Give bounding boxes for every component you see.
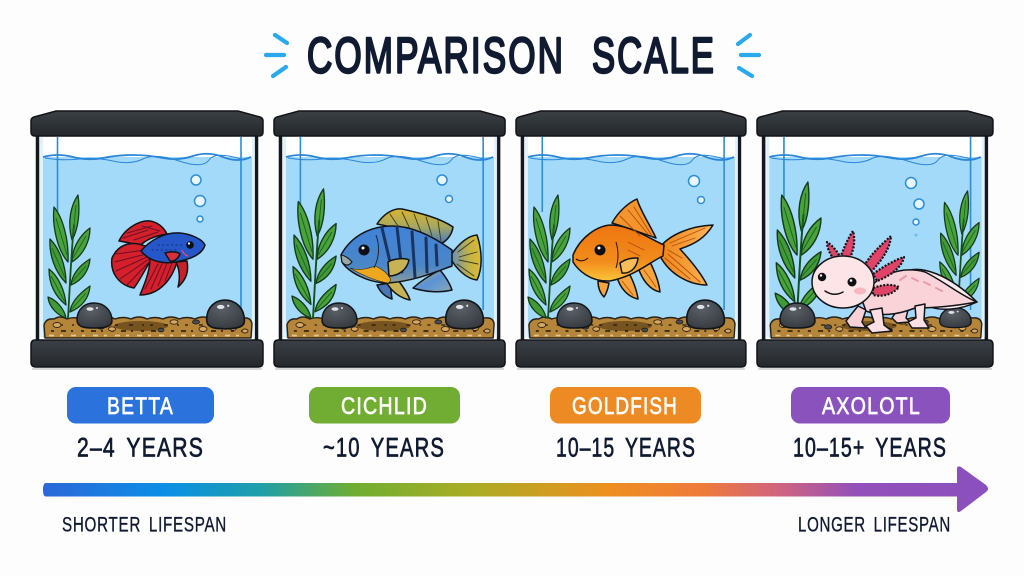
label: cichlid (309, 387, 460, 424)
bubbles (191, 175, 206, 222)
bubbles (688, 176, 704, 204)
label: axolotl: AXOLOTL (822, 393, 921, 420)
cichlid fish (341, 209, 481, 300)
plant (48, 195, 90, 318)
rocks (77, 300, 244, 329)
rocks (322, 300, 483, 329)
bubbles (906, 178, 924, 236)
panel: cichlid tank (274, 111, 505, 369)
tank frame (31, 111, 263, 369)
arrow: lifespan gradient scale (43, 466, 988, 512)
rocks (557, 300, 724, 329)
tank frame (757, 111, 993, 369)
title: SCALE (592, 28, 716, 84)
title: COMPARISON (307, 28, 565, 84)
caption: longer lifespan: LONGER LIFESPAN (798, 514, 951, 536)
goldfish (573, 199, 713, 299)
label: goldfish: GOLDFISH (572, 393, 678, 420)
tank frame (274, 111, 505, 369)
lifespan: betta: 2–4 YEARS (77, 432, 204, 462)
bubbles (437, 175, 452, 202)
label: betta: BETTA (107, 393, 174, 420)
panel: betta tank (31, 111, 263, 369)
tank frame (516, 111, 746, 369)
betta fish (112, 221, 205, 295)
plant (528, 195, 570, 318)
lifespan: cichlid: ~10 YEARS (323, 432, 445, 462)
label: betta (67, 387, 214, 424)
lifespan: goldfish: 10–15 YEARS (556, 432, 696, 462)
lifespan: axolotl: 10–15+ YEARS (793, 432, 947, 462)
icon: left title sparks (266, 35, 287, 76)
plants (775, 182, 979, 316)
panel: goldfish tank (516, 111, 746, 369)
panel: axolotl tank (757, 111, 993, 369)
label: goldfish (550, 387, 701, 424)
icon: right title sparks (738, 35, 759, 76)
rocks (780, 303, 971, 328)
label: cichlid: CICHLID (341, 393, 428, 420)
plant (292, 189, 336, 318)
caption: shorter lifespan: SHORTER LIFESPAN (62, 514, 227, 536)
axolotl (812, 231, 977, 333)
label: axolotl (791, 387, 950, 424)
